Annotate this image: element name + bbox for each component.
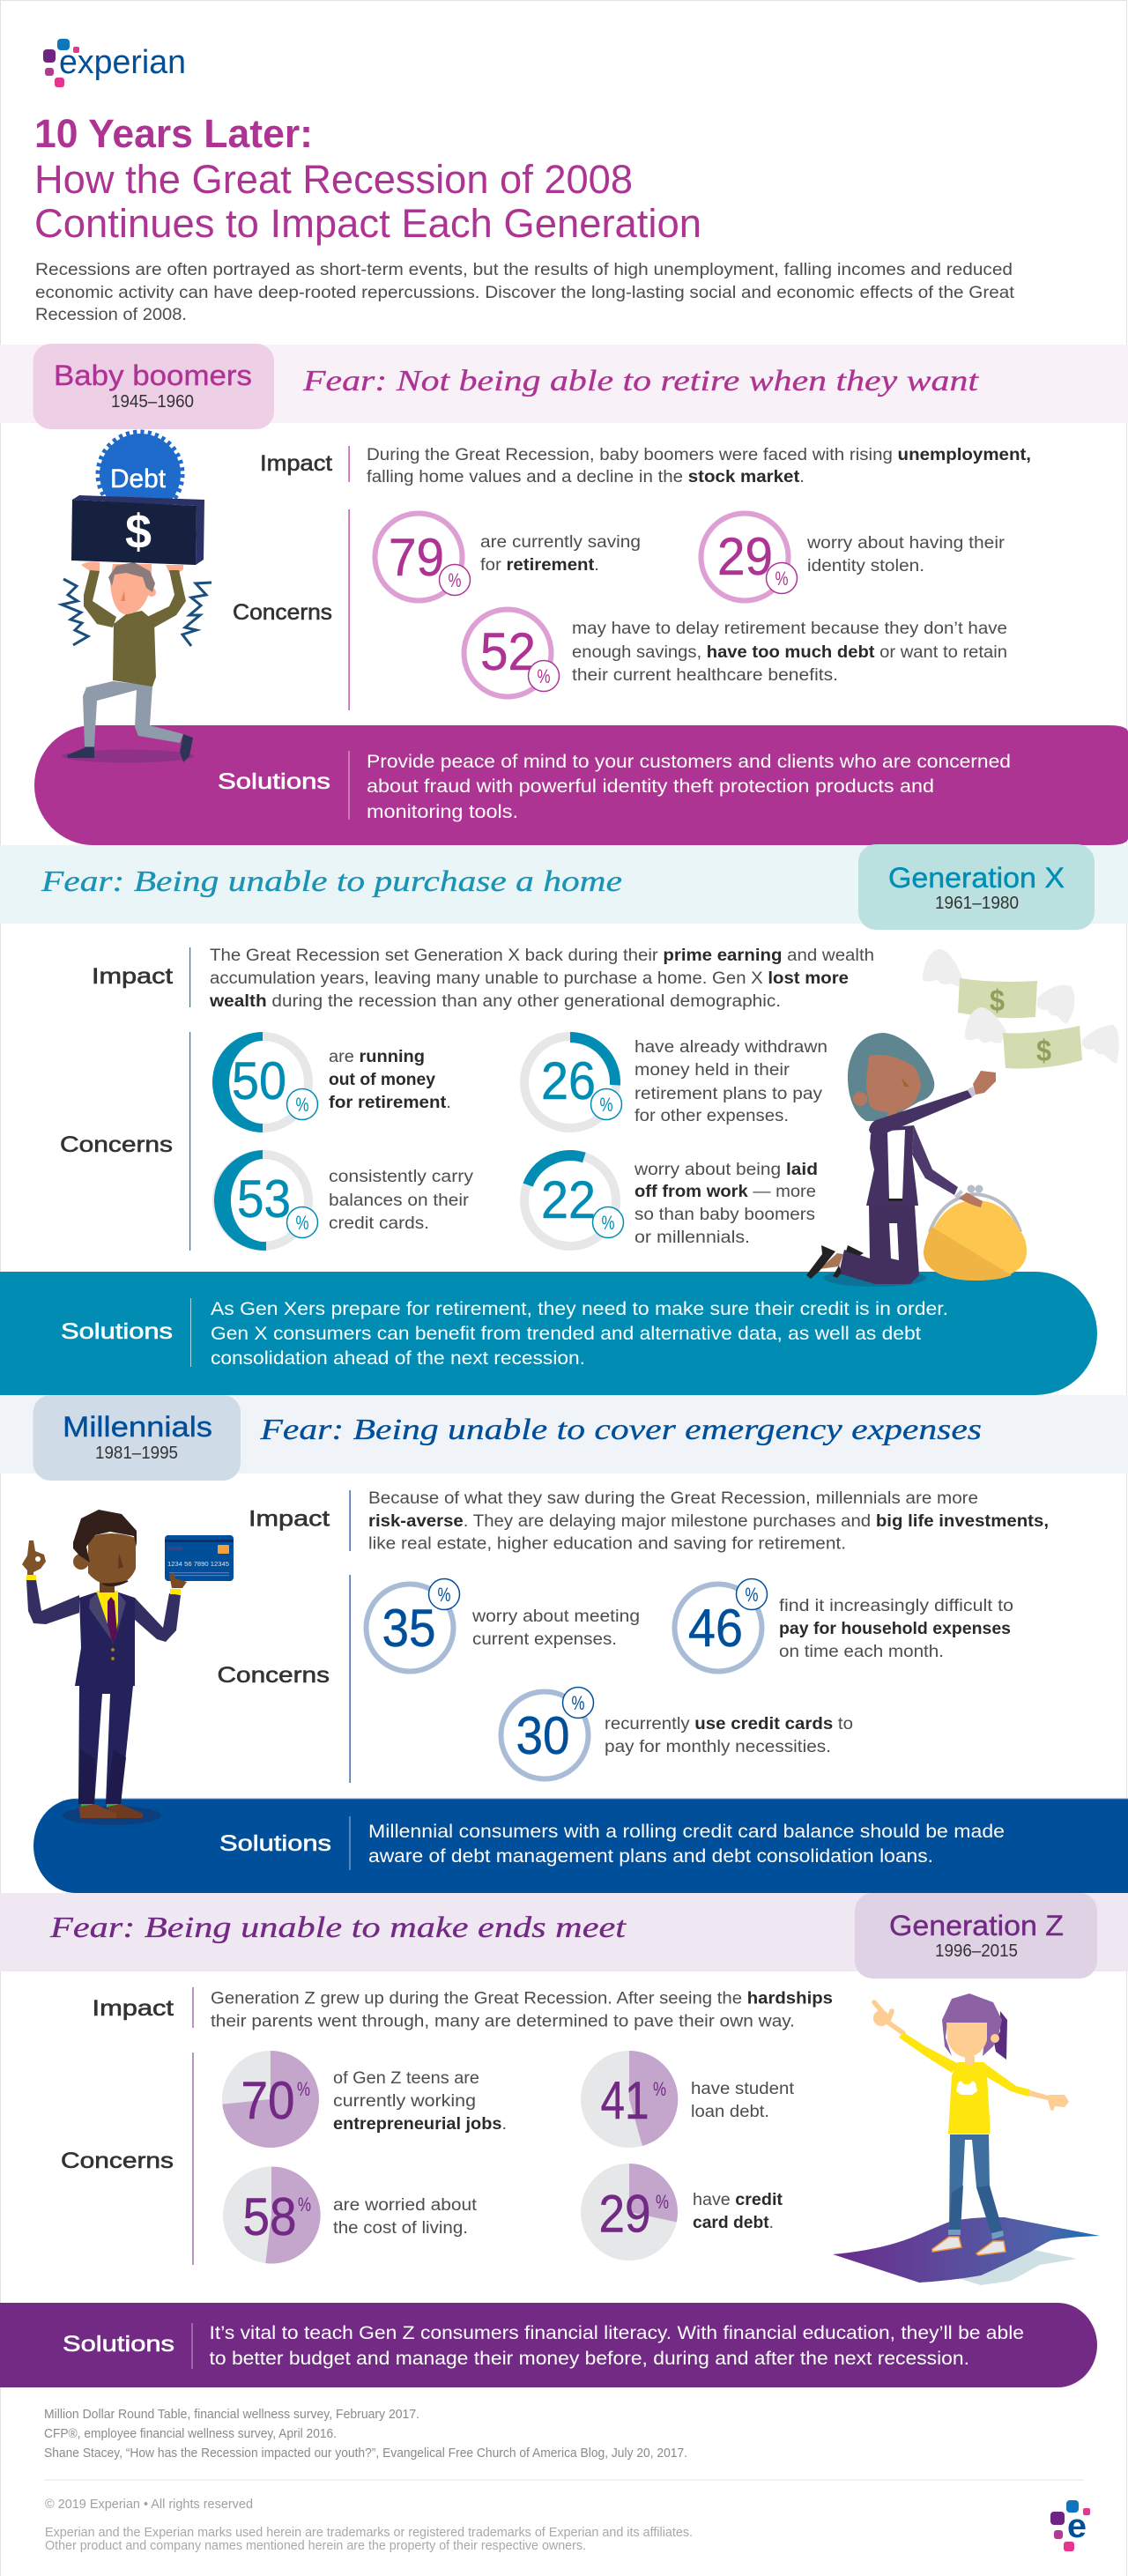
impact row: risk-averse . They are delaying major milestone purchases and big life investments, [368, 1512, 1049, 1531]
solutions pill: Solutions [219, 1831, 331, 1856]
stat: 50%: 50 [232, 1051, 286, 1110]
concerns [233, 509, 1007, 710]
banner: millennials fear: Millennials [63, 1411, 212, 1443]
banner: baby boomers fear [0, 344, 1128, 429]
stat: 29%: identity stolen. [807, 557, 924, 575]
stat: 35%: current expenses. [472, 1630, 617, 1649]
legal footer [45, 2497, 693, 2553]
solutions pill: monitoring tools. [367, 802, 518, 822]
impact row: The Great Recession set Generation X back during their prime earning and wealth [210, 947, 874, 965]
solutions pill: Provide peace of mind to your customers and clients who are concerned [367, 752, 1011, 772]
stat: 52%: enough savings, have too much debt or want to retain [572, 643, 1007, 662]
stat: 30%: pay for monthly necessities. [605, 1738, 831, 1756]
sources: Million Dollar Round Table, financial wellness survey, February 2017. [44, 2407, 419, 2422]
stat: 30%: recurrently use credit cards to [605, 1715, 853, 1733]
solutions pill: Solutions [218, 769, 330, 794]
stat: 52%: % [538, 665, 550, 687]
illustration: man lifting debt box: Debt [110, 464, 167, 494]
stat: 26%: % [599, 1094, 613, 1116]
stat: 22%: or millennials. [634, 1229, 750, 1247]
panel: baby boomers [0, 344, 1128, 845]
banner: generation X fear: Generation X [888, 862, 1065, 894]
solutions pill: It’s vital to teach Gen Z consumers financial literacy. With financial education, they’ll be able [210, 2323, 1024, 2343]
impact row: falling home values and a decline in the stock market . [367, 468, 805, 486]
illustration: man lifting debt box [62, 432, 212, 763]
panel: millennials [0, 1395, 1128, 1893]
stat: 29%: % [776, 568, 788, 590]
stat: 46%: % [746, 1584, 758, 1606]
solutions pill: Millennial consumers with a rolling credit card balance should be made [368, 1822, 1005, 1842]
solutions pill: Solutions [61, 1319, 173, 1344]
stat: 79%: % [448, 569, 462, 591]
stat: 46%: 46 [688, 1599, 743, 1658]
stat: 26% [524, 1036, 827, 1128]
stat: 29% [581, 2164, 783, 2260]
stat: 30%: % [571, 1692, 585, 1714]
stat: 70%: currently working [333, 2092, 476, 2111]
stat: 41% [581, 2051, 795, 2148]
logo: Experian [43, 39, 186, 87]
stat: 29% [701, 513, 1006, 601]
intro text: Recessions are often portrayed as short-term events, but the results of high unemployment, falling incomes and reduced [35, 261, 1013, 279]
intro text: economic activity can have deep-rooted repercussions. Discover the long-lasting social and economic effects of the Great [35, 284, 1015, 302]
sources [44, 2407, 687, 2461]
concerns [61, 2051, 795, 2265]
solutions pill: aware of debt management plans and debt consolidation loans. [368, 1846, 933, 1867]
stat: 35%: % [437, 1584, 451, 1606]
panel: generation X [0, 844, 1128, 1395]
stat: 70%: % [297, 2078, 310, 2100]
stat: 22% [524, 1154, 818, 1247]
illustration: girl on flying carpet [833, 1993, 1100, 2285]
stat: 53%: 53 [237, 1169, 291, 1229]
stat: 50%: for retirement . [329, 1094, 451, 1112]
stat: 35%: worry about meeting [471, 1607, 640, 1626]
impact row: Generation Z grew up during the Great Recession. After seeing the hardships [211, 1990, 833, 2008]
logo: Experian: experian [59, 44, 186, 81]
impact row: like real estate, higher education and saving for retirement. [368, 1535, 846, 1553]
stat: 79%: 79 [389, 528, 444, 587]
logo: Experian mark: e [1067, 2508, 1087, 2545]
solutions pill [0, 2303, 1097, 2387]
impact row [92, 947, 874, 1011]
stat: 53% [214, 1150, 474, 1251]
impact row: Impact [92, 1996, 174, 2021]
concerns [60, 1032, 827, 1251]
stat: 58%: 58 [243, 2187, 296, 2246]
stat: 26%: 26 [541, 1051, 596, 1110]
sources: CFP®, employee financial wellness survey, April 2016. [44, 2426, 337, 2441]
stat: 46%: find it increasingly difficult to [779, 1597, 1013, 1615]
stat: 52%: 52 [480, 622, 536, 681]
stat: 29%: 29 [599, 2185, 650, 2244]
stat: 52%: their current healthcare benefits. [572, 666, 838, 685]
solutions pill: to better budget and manage their money before, during and after the next recession. [210, 2349, 969, 2369]
stat: 41%: have student [691, 2080, 795, 2098]
illustration: woman with purse and flying money: $ [990, 984, 1005, 1018]
legal footer: Other product and company names mentioned herein are the property of their respective owners. [45, 2538, 586, 2553]
stat: 58%: % [298, 2194, 311, 2216]
impact row: wealth during the recession than any other generational demographic. [209, 992, 781, 1011]
stat: 79%: for retirement . [480, 556, 599, 575]
banner: generation Z fear: 1996–2015 [935, 1941, 1018, 1961]
title [34, 111, 701, 246]
banner: baby boomers fear: Fear: Not being able to retire when they want [302, 365, 980, 397]
stat: 50% [212, 1032, 451, 1132]
stat: 26%: for other expenses. [634, 1107, 789, 1125]
stat: 29%: worry about having their [806, 534, 1006, 553]
stat: 26%: retirement plans to pay [634, 1085, 823, 1103]
stat: 79% [375, 513, 641, 601]
stat: 35%: 35 [382, 1599, 435, 1658]
illustration: man with credit card: 1234 56 7890 12345 [167, 1562, 229, 1568]
stat: 53%: credit cards. [329, 1214, 429, 1233]
stat: 22%: % [601, 1212, 615, 1234]
stat: 52%: may have to delay retirement because they don’t have [572, 620, 1007, 638]
concerns: Concerns [233, 600, 332, 625]
stat: 26%: money held in their [634, 1061, 790, 1080]
stat: 22%: worry about being laid [634, 1161, 818, 1179]
impact row [249, 1489, 1049, 1553]
banner: generation Z fear [0, 1893, 1128, 1978]
banner: generation X fear: Fear: Being unable to purchase a home [41, 865, 622, 898]
concerns: Concerns [217, 1663, 330, 1688]
concerns [217, 1575, 1013, 1783]
intro text [35, 261, 1015, 324]
illustration: woman with purse and flying money [806, 949, 1119, 1287]
banner: generation X fear [0, 844, 1128, 930]
banner: baby boomers fear: 1945–1960 [111, 392, 194, 412]
solutions pill [34, 725, 1128, 845]
stat: 22%: off from work — more [634, 1183, 816, 1201]
solutions pill [33, 1799, 1128, 1893]
stat: 29%: 29 [717, 527, 773, 586]
banner: baby boomers fear: Baby boomers [54, 360, 252, 391]
stat: 46%: on time each month. [779, 1643, 944, 1661]
stat: 29%: % [656, 2191, 669, 2213]
stat: 58%: are worried about [333, 2196, 478, 2215]
stat: 50%: are running [329, 1048, 425, 1066]
solutions pill: consolidation ahead of the next recession. [211, 1348, 585, 1369]
stat: 79%: are currently saving [480, 533, 641, 552]
stat: 30%: 30 [516, 1706, 569, 1765]
impact row [260, 446, 1031, 486]
stat: 70%: of Gen Z teens are [333, 2069, 479, 2088]
impact row: During the Great Recession, baby boomers were faced with rising unemployment, [367, 446, 1031, 464]
sources: Shane Stacey, “How has the Recession impacted our youth?”, Evangelical Free Church of America Blog, July 20, 2017. [44, 2446, 687, 2461]
stat: 29%: have credit [693, 2191, 783, 2209]
stat: 53%: balances on their [329, 1191, 470, 1210]
impact row: Impact [249, 1507, 330, 1532]
concerns: Concerns [61, 2149, 174, 2173]
impact row: their parents went through, many are determined to pave their own way. [211, 2013, 795, 2030]
stat: 58% [223, 2166, 478, 2263]
banner: generation Z fear: Generation Z [889, 1910, 1064, 1941]
illustration: man with credit card [22, 1510, 234, 1825]
banner: generation X fear: 1961–1980 [935, 894, 1019, 913]
legal footer: © 2019 Experian • All rights reserved [45, 2497, 253, 2512]
stat: 50%: % [296, 1094, 308, 1116]
banner: generation Z fear: Fear: Being unable to make ends meet [49, 1912, 627, 1944]
stat: 53%: % [296, 1212, 308, 1234]
solutions pill: Solutions [63, 2332, 174, 2357]
title: How the Great Recession of 2008 [34, 157, 633, 202]
impact row: Impact [260, 451, 332, 476]
banner: millennials fear [0, 1395, 1128, 1481]
intro text: Recession of 2008. [35, 306, 187, 324]
stat: 41%: loan debt. [691, 2103, 769, 2121]
stat: 22%: 22 [541, 1170, 596, 1229]
title: Continues to Impact Each Generation [34, 201, 701, 246]
solutions pill: As Gen Xers prepare for retirement, they need to make sure their credit is in order. [211, 1299, 948, 1319]
banner: millennials fear: Fear: Being unable to cover emergency expenses [259, 1414, 982, 1446]
impact row: Because of what they saw during the Great Recession, millennials are more [368, 1489, 978, 1508]
impact row: accumulation years, leaving many unable to purchase a home. Gen X lost more [210, 969, 849, 988]
stat: 50%: out of money [329, 1071, 435, 1089]
stat: 29%: card debt. [693, 2214, 774, 2232]
legal footer: Experian and the Experian marks used herein are trademarks or registered trademarks of Experian and its affiliates. [45, 2525, 693, 2540]
solutions pill [0, 1272, 1097, 1395]
stat: 30% [501, 1687, 853, 1778]
stat: 53%: consistently carry [329, 1168, 474, 1186]
stat: 70%: entrepreneurial jobs . [333, 2115, 507, 2134]
impact row: Impact [92, 964, 173, 989]
stat: 46%: pay for household expenses [779, 1620, 1011, 1638]
stat: 41%: 41 [601, 2071, 649, 2130]
illustration: woman with purse and flying money: $ [1036, 1035, 1051, 1068]
stat: 52% [464, 610, 1007, 696]
stat: 70%: 70 [241, 2071, 294, 2130]
solutions pill: Gen X consumers can benefit from trended and alternative data, as well as debt [211, 1324, 921, 1344]
stat: 26%: have already withdrawn [634, 1038, 827, 1057]
logo: Experian mark [1050, 2500, 1090, 2551]
impact row [92, 1987, 833, 2030]
stat: 22%: so than baby boomers [634, 1206, 815, 1224]
stat: 46% [675, 1579, 1013, 1671]
banner: millennials fear: 1981–1995 [95, 1444, 178, 1463]
stat: 58%: the cost of living. [333, 2219, 468, 2238]
concerns: Concerns [60, 1132, 173, 1157]
illustration: man lifting debt box: $ [125, 504, 152, 559]
stat: 70% [222, 2051, 507, 2148]
stat: 41%: % [653, 2078, 666, 2100]
stat: 35% [367, 1579, 640, 1671]
panel: generation Z [0, 1893, 1128, 2387]
title: 10 Years Later: [34, 111, 313, 156]
solutions pill: about fraud with powerful identity theft protection products and [367, 776, 934, 797]
